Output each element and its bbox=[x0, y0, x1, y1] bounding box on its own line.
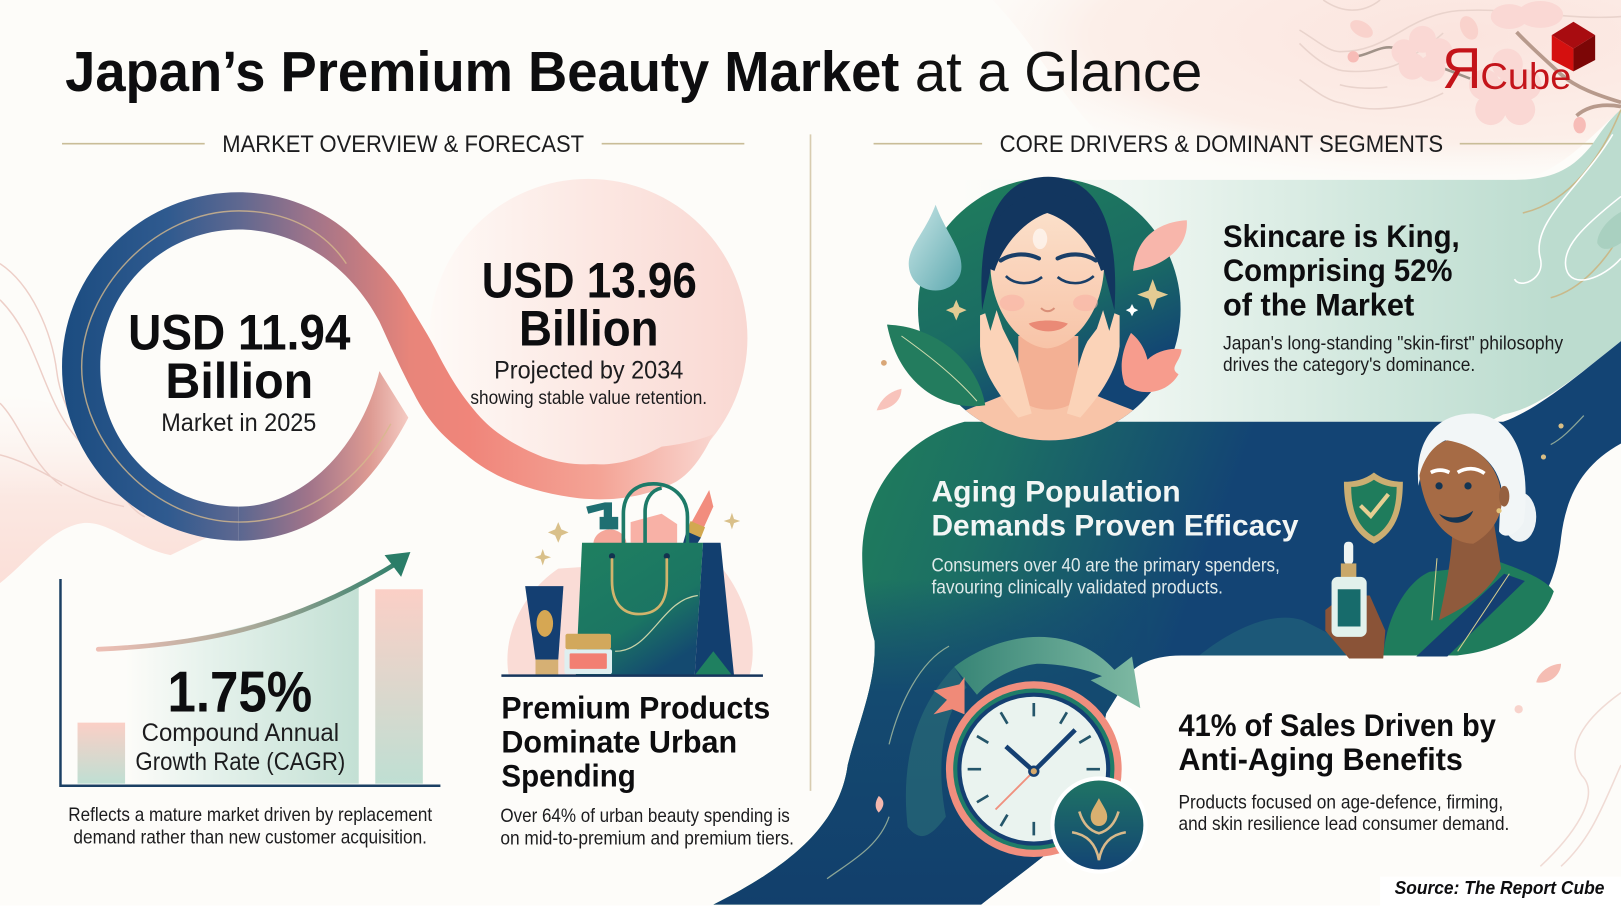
text: skincare is king: Comprising 52% bbox=[1223, 253, 1452, 288]
hand and serum bottle bbox=[1325, 542, 1385, 659]
bag side bbox=[695, 543, 734, 675]
axes bbox=[60, 579, 440, 786]
text: anti-aging sales bbox=[1179, 708, 1509, 835]
robe bbox=[1383, 558, 1554, 655]
jar bbox=[564, 634, 612, 674]
2025 value: USD 11.94 bbox=[128, 304, 351, 360]
text: premium products bbox=[500, 691, 794, 850]
text: CAGR caption bbox=[68, 804, 433, 849]
illustration: woman applying skincare bbox=[877, 177, 1189, 455]
clock hands bbox=[1006, 730, 1075, 771]
text: aging population: Demands Proven Efficacy bbox=[931, 510, 1299, 543]
logo: RCube: Cube bbox=[1480, 55, 1571, 97]
background: lower right petals and waves bbox=[1515, 664, 1621, 866]
text: skincare is king: Japan's long-standing "skin-first" philosophy bbox=[1223, 332, 1563, 354]
lipstick bbox=[682, 490, 713, 548]
background: left pink waves bbox=[0, 264, 239, 583]
text: anti-aging sales: Anti-Aging Benefits bbox=[1179, 742, 1463, 777]
face shape bbox=[990, 213, 1104, 348]
source credit: Source: The Report Cube bbox=[1395, 877, 1604, 898]
growth arrow bbox=[98, 552, 410, 649]
clock ticks bbox=[968, 703, 1100, 835]
panel: CAGR chart bbox=[60, 552, 440, 786]
text: skincare is king bbox=[1223, 219, 1563, 376]
text: aging population bbox=[931, 475, 1299, 598]
panel: skincare mint background bbox=[910, 110, 1621, 422]
panel: CAGR chart: Growth Rate (CAGR) bbox=[135, 749, 345, 776]
title: at a Glance bbox=[915, 41, 1202, 104]
shoulders bbox=[966, 396, 1133, 440]
text: premium products: Premium Products bbox=[501, 691, 770, 726]
growth area bbox=[126, 586, 359, 784]
circular arrow bbox=[954, 637, 1140, 708]
hairline sides bbox=[984, 192, 1112, 271]
2034 value: Billion bbox=[519, 300, 659, 356]
text: aging population: favouring clinically validated products. bbox=[931, 576, 1223, 598]
hands bbox=[980, 310, 1032, 418]
projected value circle bbox=[429, 179, 747, 497]
2034 value bbox=[470, 253, 707, 409]
text: skincare is king: drives the category's dominance. bbox=[1223, 354, 1475, 376]
icon: droplet bbox=[909, 205, 961, 291]
nose and lips bbox=[1041, 308, 1054, 311]
panel: market value infinity ribbon bbox=[62, 179, 747, 541]
swirl behind clock bbox=[906, 667, 967, 836]
hair bun bbox=[1503, 492, 1536, 542]
background: top right wave lines bbox=[1299, 0, 1621, 109]
2025 value: Billion bbox=[165, 353, 313, 409]
text: anti-aging sales: Products focused on age-defence, firming, bbox=[1179, 791, 1503, 813]
panel: CAGR chart: 1.75% bbox=[167, 660, 312, 724]
icon: leaf bbox=[887, 325, 985, 406]
illustration: older woman with serum bbox=[1325, 414, 1554, 659]
text: skincare is king: of the Market bbox=[1223, 287, 1414, 322]
brows and eyes bbox=[1001, 254, 1096, 261]
text: aging population: Aging Population bbox=[931, 475, 1181, 508]
pink product bbox=[631, 514, 677, 543]
panel: aging population and clock blue background bbox=[703, 341, 1621, 906]
badge bbox=[1050, 776, 1148, 874]
text: premium products: Spending bbox=[501, 759, 636, 794]
ring bottom tail bbox=[239, 371, 408, 541]
bars bbox=[78, 723, 125, 784]
source credit bbox=[1380, 877, 1621, 914]
icon: red cube bbox=[1552, 22, 1595, 71]
sparkles bbox=[548, 522, 569, 543]
text: premium products: Dominate Urban bbox=[501, 725, 737, 760]
hair bbox=[981, 177, 1115, 310]
ribbon bbox=[62, 192, 713, 541]
icon: top petal bbox=[1133, 220, 1187, 271]
neck bbox=[1018, 336, 1078, 410]
hair bbox=[1418, 414, 1526, 536]
bottle bbox=[586, 502, 618, 529]
background: top right blush bbox=[992, 0, 1621, 180]
text: premium products: on mid-to-premium and premium tiers. bbox=[500, 828, 794, 850]
logo: RCube bbox=[1442, 22, 1595, 101]
2034 value: showing stable value retention. bbox=[470, 387, 707, 409]
heading: core drivers: CORE DRIVERS & DOMINANT SEGMENTS bbox=[1000, 131, 1443, 158]
2034 value: USD 13.96 bbox=[482, 253, 697, 309]
title: Japan’s Premium Beauty Market bbox=[65, 41, 899, 104]
text: anti-aging sales: and skin resilience lead consumer demand. bbox=[1179, 813, 1509, 835]
text: CAGR caption: demand rather than new customer acquisition. bbox=[73, 827, 427, 849]
text: anti-aging sales: 41% of Sales Driven by bbox=[1179, 708, 1497, 743]
icon: lotus bbox=[1122, 333, 1182, 392]
2034 value: Projected by 2034 bbox=[494, 357, 684, 384]
handles bbox=[623, 484, 687, 548]
illustration: cherry blossoms bbox=[1347, 1, 1621, 133]
gold accent line bbox=[82, 211, 391, 522]
shield bbox=[1344, 472, 1403, 544]
neck bbox=[1439, 522, 1501, 620]
illustration: anti-aging clock bbox=[934, 637, 1148, 874]
tube bbox=[525, 586, 563, 675]
text: CAGR caption: Reflects a mature market driven by replacement bbox=[68, 804, 433, 826]
clock body bbox=[946, 681, 1122, 857]
logo: RCube: Я bbox=[1442, 37, 1481, 101]
icon: shopping bag with cosmetics bbox=[501, 484, 763, 676]
text: aging population: Consumers over 40 are the primary spenders, bbox=[931, 555, 1280, 577]
bag front bbox=[576, 543, 703, 675]
2025 value: Market in 2025 bbox=[161, 410, 316, 437]
sparkles bbox=[1137, 279, 1168, 310]
2025 value bbox=[128, 304, 351, 437]
heading: market overview: MARKET OVERVIEW & FORECAST bbox=[222, 131, 584, 158]
text: premium products: Over 64% of urban beauty spending is bbox=[500, 805, 790, 827]
face bbox=[1419, 440, 1502, 544]
text: skincare is king: Skincare is King, bbox=[1223, 219, 1460, 254]
panel: CAGR chart: Compound Annual bbox=[142, 720, 339, 747]
